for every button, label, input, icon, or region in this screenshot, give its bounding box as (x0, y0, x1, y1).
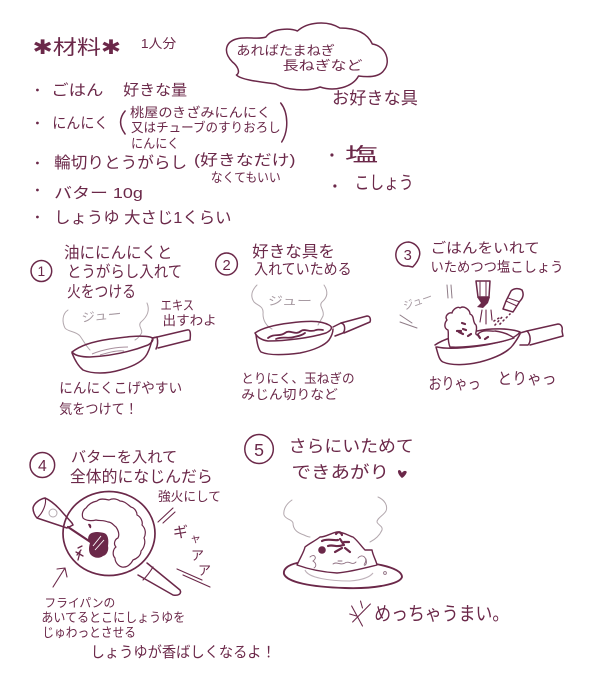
step 1 aside: 出すわよ (163, 313, 217, 328)
label: favourite fillings: お好きな具 (332, 89, 418, 108)
step 2 number: 2 (222, 258, 231, 274)
step 2 heading (252, 243, 352, 278)
step 3 sound effect caption: とりゃっ (497, 371, 557, 388)
ingredient: butter (36, 185, 143, 202)
step 1 number: 1 (38, 263, 45, 279)
step 1 number (31, 260, 52, 282)
step 4 sound effect: ア (191, 548, 204, 563)
ingredient: garlic: にんにく (52, 116, 108, 132)
step 3 number: 3 (404, 248, 412, 264)
step 1 note (59, 380, 182, 417)
step 1 note: 気をつけて！ (59, 401, 138, 417)
callout: optional fillings cloud: 長ねぎなど (283, 58, 363, 73)
step 1 heading: 油ににんにくと (64, 244, 172, 262)
callout: optional fillings cloud (226, 23, 387, 90)
step 5 illustration: finished fried rice on plate (284, 497, 402, 588)
step 4 note (41, 596, 276, 661)
step 3 sound effect caption (428, 371, 557, 393)
step 1 aside (161, 298, 217, 328)
title: ingredients: 1人分 (141, 36, 176, 51)
ingredient: pepper (333, 173, 414, 193)
step 3 heading (430, 240, 563, 275)
step 2 heading: 入れていためる (254, 261, 352, 278)
step 5 number (245, 434, 273, 464)
step 1 illustration: pan with garlic (63, 303, 190, 373)
ingredient: sliced chili: なくてもいい (211, 170, 281, 185)
step 2 heading: 好きな具を (252, 243, 335, 261)
title: ingredients (33, 36, 176, 59)
ingredient: soy sauce: しょうゆ 大さじ1くらい (54, 209, 231, 227)
step 3 heading: いためつつ塩こしょう (430, 259, 563, 275)
closing remark: めっちゃうまい。 (374, 603, 509, 624)
step 4 sound effect: ア (198, 563, 211, 578)
step 2 illustration: pan with fillings: ジュー (268, 294, 312, 308)
step 1 heading: とうがらし入れて (67, 263, 182, 281)
step 5 heading (289, 437, 414, 482)
step 5 heading: できあがり (292, 463, 389, 482)
ingredient: sliced chili (36, 152, 296, 185)
step 4 number: 4 (38, 458, 47, 475)
step 4 heading: 全体的になじんだら (70, 468, 213, 486)
closing remark (350, 601, 509, 626)
step 5 number: 5 (254, 440, 264, 460)
step 4 note: しょうゆが香ばしくなるよ！ (91, 644, 276, 661)
step 3 illustration: pan with rice and seasoning (435, 281, 563, 365)
ingredient: garlic: にんにく (131, 136, 179, 151)
ingredient: salt: 塩 (345, 144, 379, 165)
step 1 aside: エキス (161, 298, 194, 313)
step 1 heading (64, 244, 182, 301)
ingredient: salt (330, 144, 379, 165)
step 4 note: じゅわっとさせる (42, 625, 136, 640)
step 1 illustration: pan with garlic: ジュー (81, 307, 122, 325)
ingredient: pepper: こしょう (355, 173, 414, 193)
step 3 heading: ごはんをいれて (430, 240, 540, 256)
ingredient: butter: バター 10g (54, 185, 143, 202)
step 2 note: みじん切りなど (241, 387, 338, 402)
step 4 heading (70, 449, 213, 486)
ingredient: garlic: 桃屋のきざみにんにく (130, 105, 271, 120)
step 3 sizzle sound: ジュー (402, 291, 434, 313)
ingredient: garlic (36, 103, 287, 151)
step 4 note: フライパンの (44, 596, 115, 610)
step 5 heading: さらにいためて (289, 437, 414, 456)
step 1 note: にんにくこげやすい (59, 380, 182, 396)
ingredient: garlic: 又はチューブのすりおろし (131, 120, 281, 135)
step 2 note (241, 371, 355, 402)
step 2 illustration: pan with fillings (252, 285, 370, 355)
callout: optional fillings cloud: あればたまねぎ (236, 43, 335, 58)
step 4 note: あいてるとこにしょうゆを (41, 610, 185, 625)
ingredient: sliced chili: 輪切りとうがらし (54, 154, 187, 172)
step 2 note: とりにく、玉ねぎの (241, 371, 355, 386)
step 2 number (216, 253, 237, 275)
step 1 heading: 火をつける (67, 283, 136, 301)
step 4 heading: バターを入れて (71, 449, 177, 466)
step 3 sizzle sound (400, 285, 452, 328)
step 4 illustration: pan from above with soy sauce (33, 492, 181, 595)
ingredient: rice: ごはん (51, 82, 104, 99)
step 3 sound effect caption: おりゃっ (428, 375, 481, 393)
step 4 sound effect: ギ (173, 524, 188, 541)
title: ingredients: ✱材料✱ (33, 37, 121, 59)
step 4 number (30, 452, 55, 478)
step 4 aside: 強火にして (158, 489, 221, 504)
step 3 number (396, 242, 420, 267)
ingredient: sliced chili: (好きなだけ) (194, 152, 296, 169)
step 4 sound effect (158, 508, 211, 587)
ingredient: rice: 好きな量 (123, 82, 187, 99)
ingredient: rice (36, 82, 187, 99)
step 4 sound effect: ャ (190, 533, 201, 545)
